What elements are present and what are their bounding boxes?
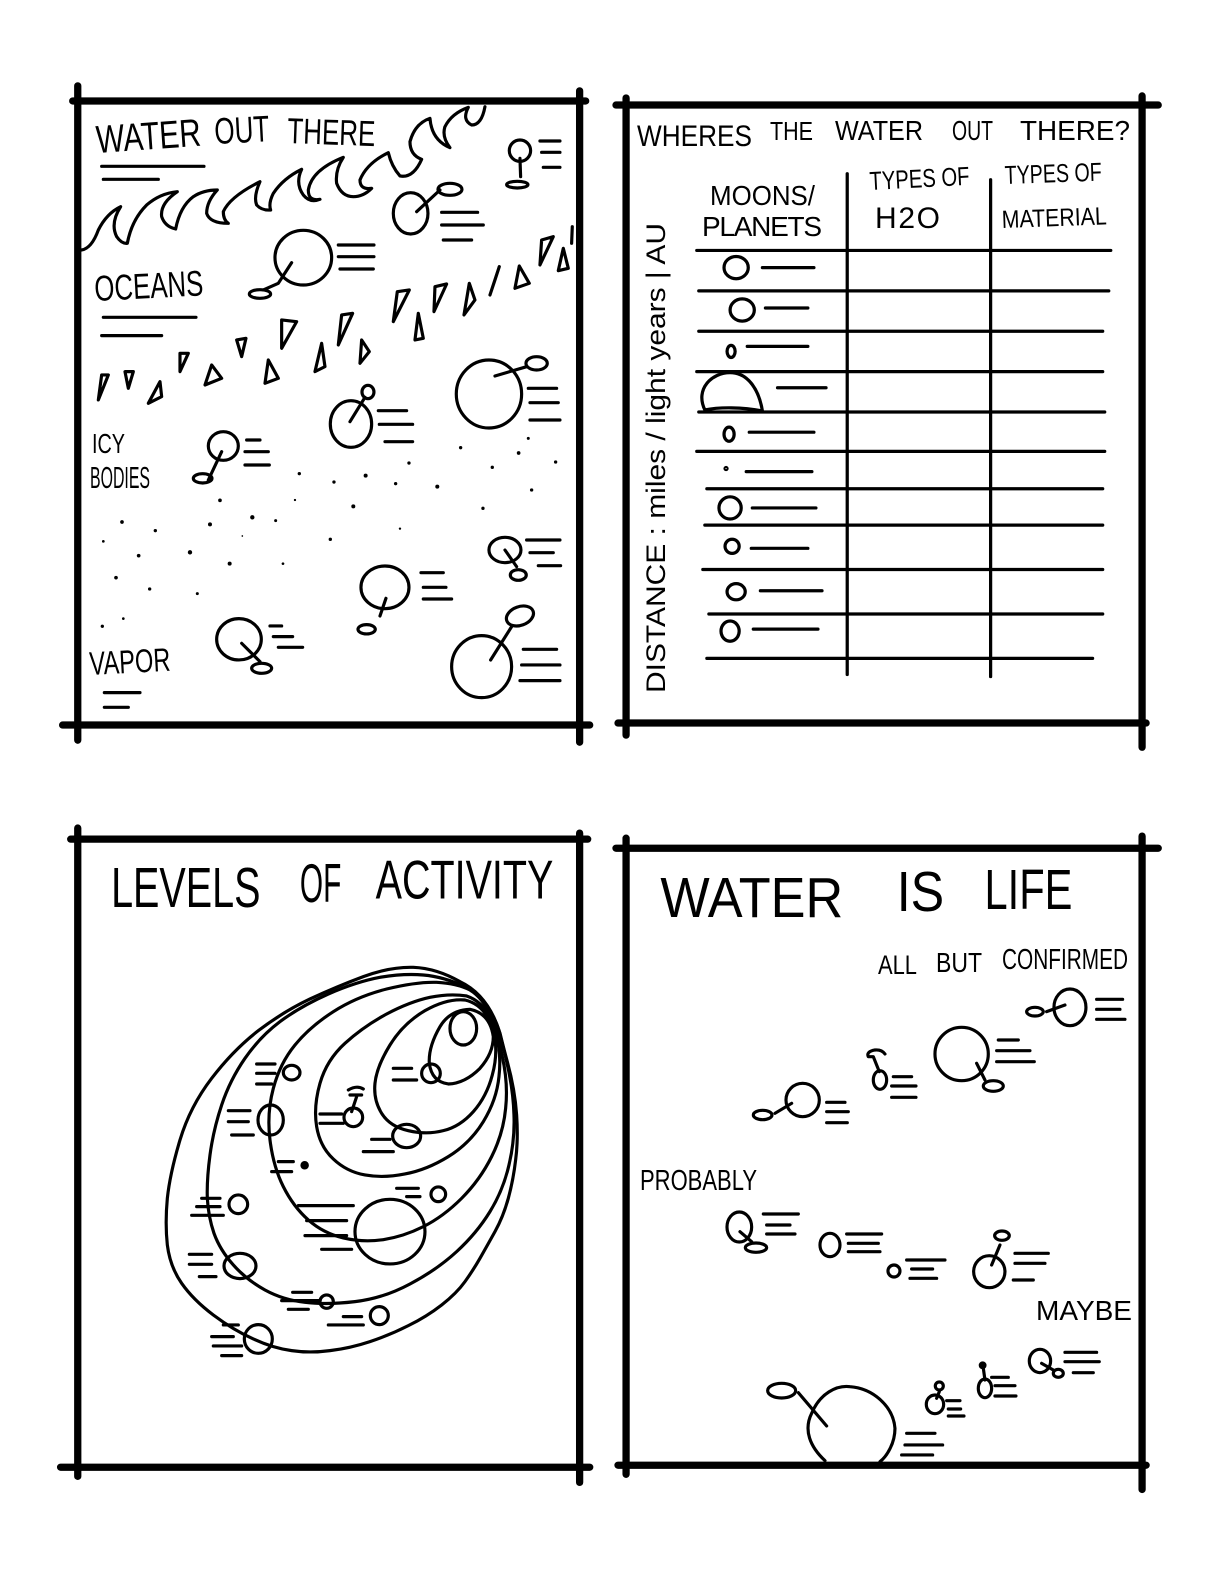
section label: bodies: BODIES [90,460,150,495]
label: maybe: MAYBE [1036,1295,1132,1326]
heading: water out there: THERE [287,110,376,154]
column header: moons/planets: PLANETS [702,211,822,242]
label: all but confirmed: CONFIRMED [1002,944,1128,976]
table row markers [702,256,826,641]
planet icon [456,357,560,428]
planet icon [249,230,374,298]
panel frame [61,828,590,1482]
column header: types of material: TYPES OF [1004,157,1102,190]
section label: oceans: OCEANS [93,262,204,309]
panel frame [616,836,1158,1489]
label: all but confirmed: BUT [936,947,982,978]
heading: LEVELS [111,856,261,919]
column header: types of H2O [869,161,970,235]
heading [111,850,553,919]
planet icon [489,537,561,580]
heading: THERE? [1020,115,1130,146]
oceans underlines [102,317,196,336]
section label: icy: ICY [92,428,125,459]
planet icon [452,602,560,698]
vertical axis label: DISTANCE : miles / light years | AU [641,223,671,693]
heading: WATER [835,115,923,146]
heading: LIFE [985,858,1072,921]
icy bodies dots [101,437,557,628]
planet icon [330,385,413,447]
column header: types of material: MATERIAL [1001,202,1107,234]
planet icon [217,619,303,673]
panel: levels of activity [61,828,590,1482]
planet icon [507,140,560,188]
all but confirmed planets [753,989,1125,1123]
heading: WHERES [637,120,752,153]
label: all but confirmed: ALL [878,950,917,980]
panel: where's the water out there table [616,96,1158,747]
planet icon [193,432,269,483]
heading underlines [102,166,204,179]
heading: water out there: OUT [213,108,270,152]
panel: water is life [616,836,1158,1489]
panel frame [616,96,1158,747]
heading: ACTIVITY [376,850,553,911]
panel: water out there [63,86,590,742]
ice shard illustration [98,227,572,403]
nested orbit rings [166,967,517,1352]
probably planets [727,1212,1048,1288]
heading: water out there: WATER [95,112,202,162]
vapor underlines [104,693,140,707]
heading [660,858,1072,929]
wave illustration [82,107,485,250]
planet icon [393,183,483,240]
activity planets with labels [189,1012,477,1356]
label: probably: PROBABLY [640,1165,757,1197]
heading: OUT [952,115,993,146]
column header: types of H2O: TYPES OF [869,161,970,196]
heading: OF [300,853,341,914]
panel frame [63,86,590,742]
section label: vapor: VAPOR [88,641,171,682]
label: all but confirmed [878,944,1128,980]
maybe planets [768,1349,1099,1462]
heading: WATER [660,866,843,929]
heading: IS [897,860,944,923]
column header: types of material [1001,157,1107,234]
column header: moons/planets [702,180,822,242]
heading: THE [770,116,813,146]
planet icon [358,566,452,634]
heading [637,115,1130,153]
table grid [697,174,1111,677]
column header: moons/planets: MOONS/ [710,180,815,211]
column header: types of H2O: H 2 O [875,202,940,235]
heading: water out there [95,108,376,162]
